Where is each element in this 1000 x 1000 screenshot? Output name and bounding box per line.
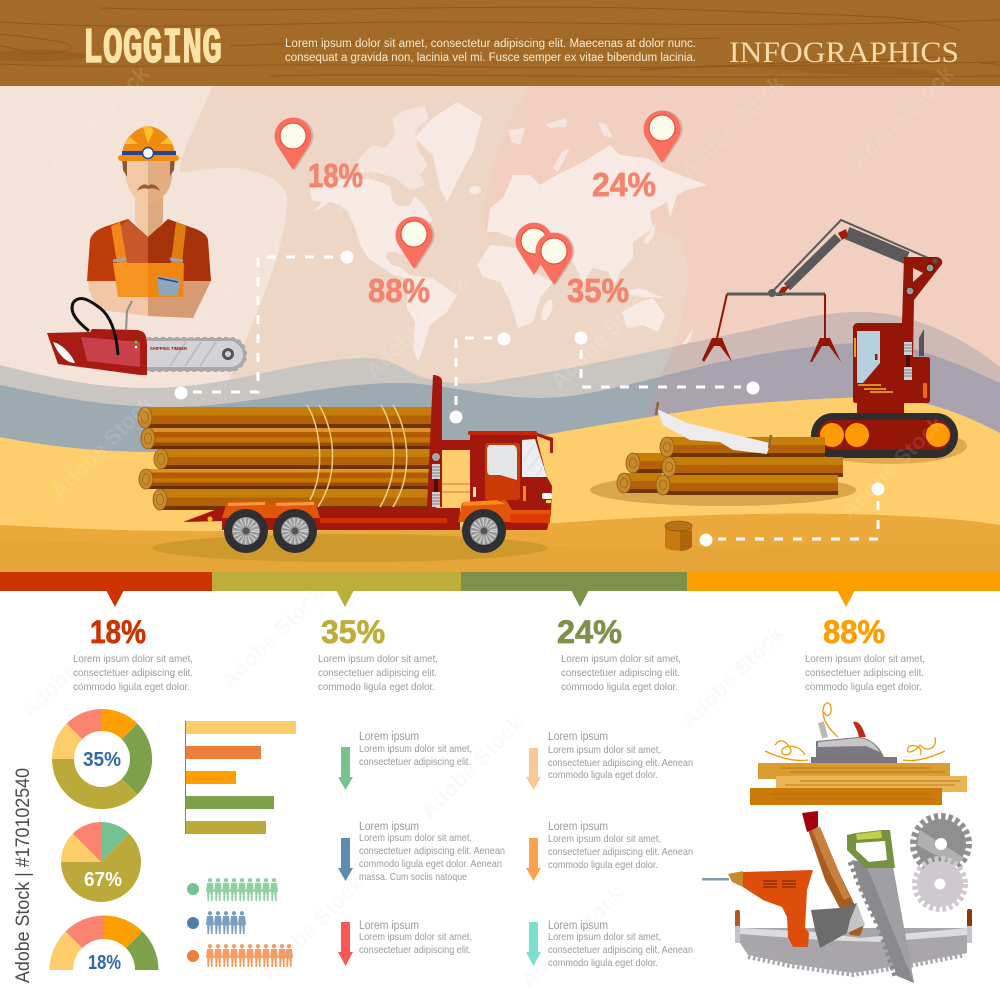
crossed arms [88, 281, 148, 316]
header text block: consequat a gravida non, lacinia vel mi. Fusce semper ex vitae bibendum lacinia. [285, 52, 696, 64]
pie chart 67%: 67% [84, 869, 122, 891]
grapple left [702, 294, 732, 362]
connector: truck [450, 332, 510, 424]
neck and face [135, 195, 163, 240]
truck shadow [152, 534, 548, 562]
watermarks: Adobe Stock [16, 610, 129, 724]
arrow item: green: Lorem ipsum [359, 731, 419, 743]
pin 35% back [516, 223, 552, 275]
arrow item: peach: Lorem ipsum [548, 731, 608, 743]
infographics heading: INFOGRAPHICS [729, 36, 959, 69]
cab body [853, 323, 930, 403]
Arctic islands [508, 118, 613, 172]
stat column 18%: consectetuer adipiscing elit. [73, 667, 193, 679]
arrow item: orange: Lorem ipsum dolor sit amet, [548, 833, 661, 845]
blade [147, 338, 246, 371]
South America [407, 275, 457, 362]
chassis [183, 508, 460, 530]
Iceland [469, 186, 481, 194]
apron [111, 222, 186, 297]
pie chart 67% [61, 822, 141, 902]
title: LOGGING [83, 21, 222, 78]
wheel: front [462, 509, 506, 553]
crawler crane [702, 220, 967, 464]
arrow item: green [338, 731, 472, 790]
stat column 88% [805, 614, 925, 693]
arrow item: teal: consectetuer adipiscing elit. Aenean [548, 944, 693, 956]
sand ground [0, 397, 1000, 572]
arrow item: orange: commodo ligula eget dolor. [548, 859, 658, 871]
arrow item: blue: massa. Cum sociis natoque [359, 871, 467, 883]
arrow item: teal [526, 920, 693, 969]
stat column 35%: Lorem ipsum dolor sit amet, [318, 653, 438, 665]
tools: two-man saw [735, 909, 972, 975]
watermarks: Adobe Stock [836, 410, 949, 524]
connector: stump [700, 482, 884, 546]
stat column 24%: commodo ligula eget dolor. [561, 681, 678, 693]
Eurasia [487, 145, 707, 285]
half donut chart 18% [50, 916, 158, 974]
blade label: SHIPPING TIMBER [150, 346, 188, 351]
Australia [622, 298, 665, 332]
header: wood plank [0, 0, 1000, 86]
arrow item: red: consectetuer adipiscing elit. [359, 944, 471, 956]
wave: far hills [0, 312, 1000, 572]
watermarks: Adobe Stock [41, 60, 154, 174]
watermarks: Adobe Stock [676, 70, 789, 184]
log pile [617, 437, 843, 495]
watermarks: Adobe Stock [516, 880, 629, 994]
people chart: green row [187, 878, 278, 901]
map label 18%: 18% [308, 157, 363, 194]
arrow item: red: Lorem ipsum [359, 920, 419, 932]
watermarks: Adobe Stock [326, 105, 439, 219]
stat column 18% [73, 614, 193, 693]
stat column 24%: consectetuer adipiscing elit. [561, 667, 680, 679]
people chart: orange row [187, 944, 293, 967]
Madagascar [539, 298, 555, 322]
watermarks: Adobe Stock [676, 620, 789, 734]
stat column 18%: Lorem ipsum dolor sit amet, [73, 653, 193, 665]
stat column 35%: commodo ligula eget dolor. [318, 681, 435, 693]
two-man saw on logs [656, 402, 771, 454]
Africa [477, 245, 553, 328]
watermarks: Adobe Stock [416, 710, 529, 824]
arrow item: peach: commodo ligula eget dolor. [548, 769, 658, 781]
map label 24%: 24% [592, 166, 656, 203]
map label 35%: 35% [567, 272, 629, 309]
arrow item: green: Lorem ipsum dolor sit amet, [359, 743, 472, 755]
Indonesia [620, 285, 663, 298]
donut chart 35%: 35% [83, 749, 121, 771]
map label 88%: 88% [368, 272, 430, 309]
saw body [47, 329, 147, 375]
arrow item: blue: commodo ligula eget dolor. Aenean [359, 858, 502, 870]
saw handle [72, 299, 118, 355]
wheel: rear 2 [273, 509, 317, 553]
header text block [285, 38, 696, 64]
stat column 35%: consectetuer adipiscing elit. [318, 667, 437, 679]
stat column 88%: consectetuer adipiscing elit. [805, 667, 924, 679]
watermarks: Adobe Stock [46, 390, 159, 504]
bar chart [185, 721, 296, 834]
stock credit: Adobe Stock | #170102540 [13, 768, 34, 983]
New Zealand [682, 328, 693, 346]
colour bar [0, 572, 1000, 607]
watermarks: Adobe Stock [216, 580, 329, 694]
arrow item: peach: Lorem ipsum dolor sit amet, [548, 744, 661, 756]
wave: far hills right tint [645, 312, 1000, 432]
straps [307, 405, 407, 507]
worker figure [87, 126, 211, 318]
log load [138, 405, 436, 510]
rear fenders [222, 501, 320, 518]
pin 88% [396, 217, 434, 269]
arrow item: orange: consectetuer adipiscing elit. Aenean [548, 846, 693, 858]
grapple bar [727, 292, 825, 296]
arrow item: blue: Lorem ipsum dolor sit amet, [359, 832, 472, 844]
helmet [118, 126, 179, 161]
connector: crane [574, 332, 760, 394]
people chart: blue row [187, 911, 246, 934]
arrow item: peach: consectetuer adipiscing elit. Aenean [548, 757, 693, 769]
boom lines [772, 220, 935, 292]
watermarks: Adobe Stock [176, 230, 289, 344]
watermarks: Adobe Stock [546, 280, 659, 394]
stat column 35% [318, 614, 438, 693]
suspension [432, 452, 470, 507]
shirt [87, 219, 148, 281]
arrow item: blue: Lorem ipsum [359, 821, 419, 833]
donut chart 35% [52, 709, 152, 809]
Japan [643, 222, 656, 244]
stat column 18%: 18% [90, 614, 146, 650]
arrow item: green: consectetuer adipiscing elit. [359, 756, 471, 768]
stat column 24%: Lorem ipsum dolor sit amet, [561, 653, 681, 665]
Canadian Arctic [358, 106, 428, 190]
connector: chainsaw [174, 250, 354, 400]
half donut chart 18%: 18% [88, 952, 121, 974]
stat column 24%: 24% [557, 614, 622, 650]
tools: circular saw blades [914, 816, 968, 909]
arrow item: teal: Lorem ipsum [548, 920, 608, 932]
North America [310, 178, 433, 282]
arm [902, 257, 942, 357]
pin 35% front [536, 233, 574, 285]
stat column 88%: Lorem ipsum dolor sit amet, [805, 653, 925, 665]
tools: hand saw [847, 830, 914, 983]
pin 18% [274, 118, 314, 170]
cab [470, 435, 552, 530]
world map [310, 102, 707, 362]
tracks [811, 413, 958, 458]
tools: plane on planks [750, 703, 967, 805]
arrow item: orange: Lorem ipsum [548, 821, 608, 833]
watermarks: Adobe Stock [361, 270, 474, 384]
log pile shadow [590, 474, 856, 506]
Greenland [415, 102, 482, 202]
wheel: rear 1 [224, 509, 268, 553]
arrow item: red: Lorem ipsum dolor sit amet, [359, 931, 472, 943]
stat column 35%: 35% [321, 614, 385, 650]
stat column 88%: commodo ligula eget dolor. [805, 681, 922, 693]
stat column 24% [557, 614, 681, 693]
watermarks: Adobe Stock [256, 870, 369, 984]
chainsaw [47, 299, 246, 375]
arrow item: teal: commodo ligula eget dolor. [548, 957, 658, 969]
tree stump [665, 521, 692, 551]
stat column 18%: commodo ligula eget dolor. [73, 681, 190, 693]
arrow item: blue: consectetuer adipiscing elit. Aenean [359, 845, 505, 857]
arrow item: peach [526, 731, 693, 790]
arrow item: teal: Lorem ipsum dolor sit amet, [548, 931, 661, 943]
grapple right [810, 294, 841, 362]
pin 24% [644, 111, 682, 163]
arrow item: blue [338, 821, 505, 883]
arrow item: orange [526, 821, 693, 881]
arrow item: red [338, 920, 472, 966]
scene background [0, 86, 1000, 572]
tools: drill [702, 870, 813, 947]
exhaust [919, 329, 924, 356]
logging truck [183, 375, 553, 553]
stat column 88%: 88% [823, 614, 885, 650]
watermarks: Adobe Stock [846, 60, 959, 174]
tools: axe [802, 811, 865, 948]
headboard [427, 375, 470, 507]
header text block: Lorem ipsum dolor sit amet, consectetur adipiscing elit. Maecenas at dolor nunc. [285, 38, 696, 50]
